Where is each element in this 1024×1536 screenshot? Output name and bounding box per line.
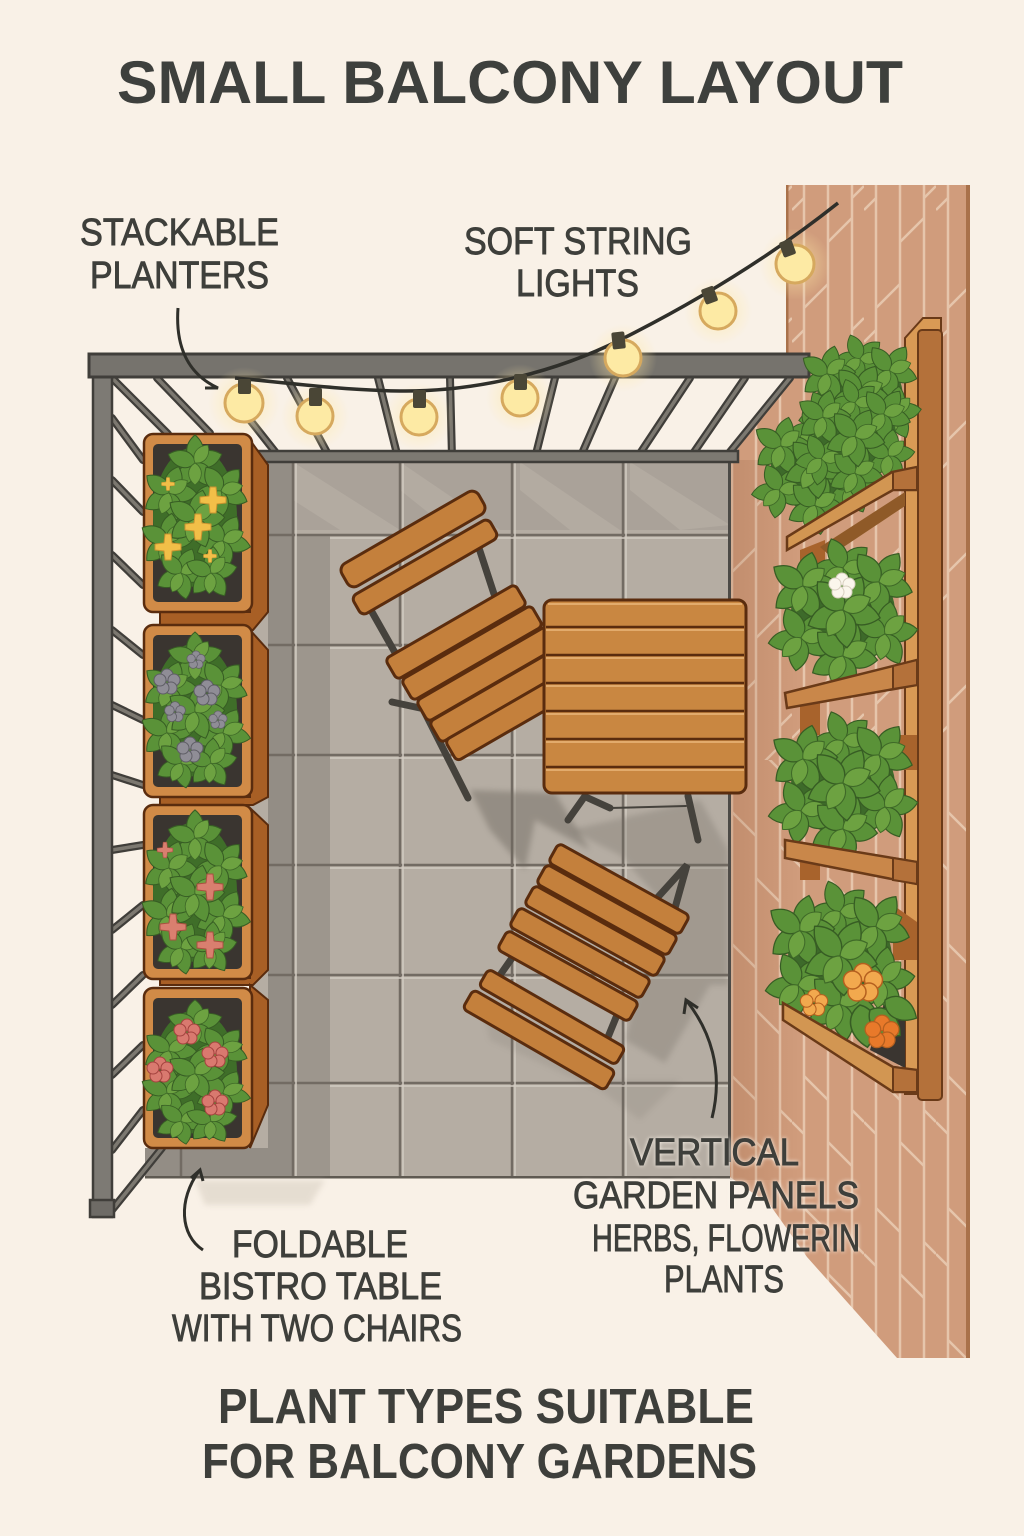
shelf supports [800,540,917,960]
label: soft string lights [464,221,692,305]
balcony railing [89,354,809,1217]
arrow: vertical garden panels [684,1000,716,1118]
title: SMALL BALCONY LAYOUT [117,49,903,116]
label: stackable planters: STACKABLE [80,212,279,254]
bottom heading: FOR BALCONY GARDENS [202,1435,757,1489]
label: soft string lights: LIGHTS [516,263,639,305]
planter 4 with red flowers [132,985,268,1152]
chair 1 [338,488,571,798]
chair 2 [462,843,690,1091]
balcony floor [145,462,731,1205]
string lights [208,203,838,451]
arrow: foldable bistro table [184,1170,203,1250]
middle herb plant [754,696,928,875]
bistro table [544,600,746,840]
shelf 4 [783,1003,917,1092]
label: vertical garden panels [573,1132,860,1301]
vertical garden panel [739,318,942,1100]
arrow: stackable planters [178,308,218,388]
label: stackable planters [80,212,279,297]
shelf 2 [785,660,917,708]
label: stackable planters: PLANTERS [90,255,269,297]
wooden post [905,318,942,1100]
orange flower plant [751,864,925,1068]
label: foldable bistro table: FOLDABLE [232,1224,408,1266]
shelf 1 [787,467,917,556]
label: vertical garden panels: PLANTS [664,1259,784,1301]
brick wall [730,185,970,1358]
planter 3 with pink flowers [132,805,268,985]
bottom heading: PLANT TYPES SUITABLE [218,1380,754,1434]
label: foldable bistro table [172,1224,462,1350]
shelf 3 [785,840,917,884]
top herb plant [739,322,930,545]
label: vertical garden panels: GARDEN PANELS [573,1175,859,1217]
label: vertical garden panels: VERTICAL [630,1132,799,1174]
planter 2 with grey flowers [132,625,268,805]
label: vertical garden panels: HERBS, FLOWERIN [592,1218,860,1260]
planter 1 with yellow flowers [132,434,268,630]
white flower plant [754,523,928,702]
label: soft string lights: SOFT STRING [464,221,692,263]
bottom heading [202,1380,757,1489]
label: foldable bistro table: BISTRO TABLE [199,1266,442,1308]
planters column [132,434,268,1152]
label: foldable bistro table: WITH TWO CHAIRS [172,1308,462,1350]
